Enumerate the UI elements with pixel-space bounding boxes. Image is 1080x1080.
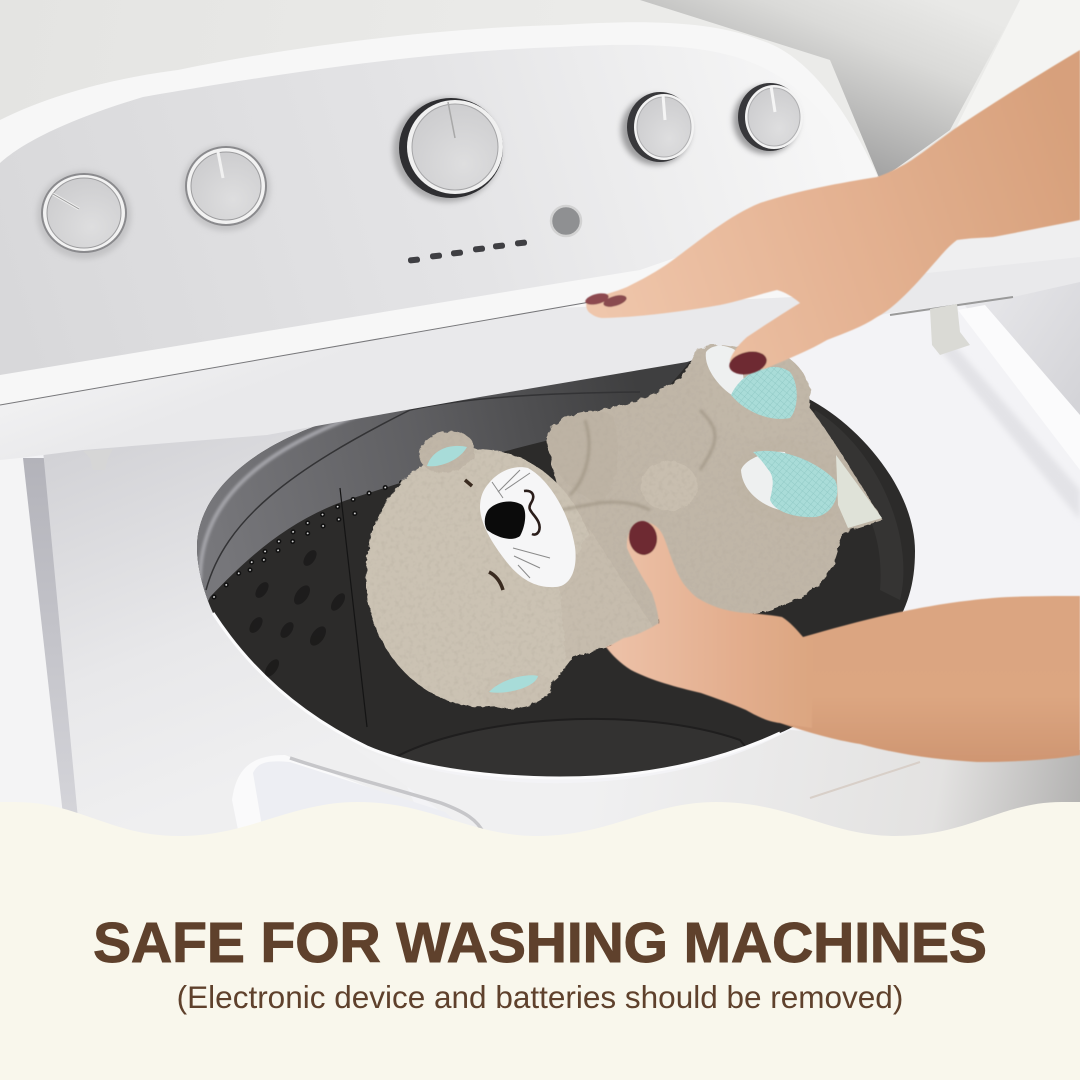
slot shadow edge <box>290 758 484 834</box>
wall background <box>0 0 1080 860</box>
drum outer right ring <box>814 410 903 600</box>
lid pin <box>83 449 113 470</box>
otter fold lines <box>560 410 715 510</box>
otter lower ear patch <box>489 675 538 693</box>
lid right edge line <box>890 297 1013 315</box>
otter whiskers <box>492 470 550 578</box>
otter ear patches <box>427 446 467 466</box>
otter neck <box>560 530 655 660</box>
left recessed deck <box>43 415 430 840</box>
otter eyes <box>465 480 503 590</box>
otter body <box>546 345 883 640</box>
otter muzzle <box>480 467 576 587</box>
lower hand nail <box>627 519 659 557</box>
drum agitator ring <box>396 718 746 756</box>
upper right white panel <box>955 0 1080 130</box>
washer drum <box>197 360 915 776</box>
right side grey surface <box>960 280 1080 440</box>
dial: far left knob <box>37 171 131 259</box>
washer console <box>0 22 877 410</box>
drum wall rim <box>198 419 356 580</box>
otter paw patches <box>706 346 837 517</box>
otter tail tag <box>836 455 882 528</box>
indicator lights <box>408 239 527 264</box>
otter small paw <box>641 461 697 511</box>
hand: upper on lid <box>584 50 1080 378</box>
lid <box>0 257 1080 470</box>
dial: large centre knob <box>393 98 503 202</box>
otter nose <box>485 501 525 539</box>
perforation rows <box>214 478 420 597</box>
console lip <box>0 22 877 410</box>
otter head <box>353 438 609 718</box>
otter fur <box>353 333 883 718</box>
upper hand nails <box>584 291 610 307</box>
right white strip <box>958 305 1080 470</box>
wall shadow behind console <box>640 0 1020 180</box>
drum opening rim <box>213 613 780 778</box>
slot ridge <box>232 755 480 840</box>
lower hand <box>606 522 812 728</box>
plush otter <box>353 333 883 718</box>
otter bottom ear <box>480 667 554 713</box>
otter top ear <box>415 427 479 477</box>
upper right washer surface <box>880 180 1080 300</box>
lid hairline <box>0 302 590 405</box>
otter lower foot <box>723 427 857 539</box>
corner seam <box>810 762 920 798</box>
subheading: (Electronic device and batteries should be removed) <box>177 979 903 1015</box>
drum floor holes <box>247 548 348 679</box>
drum wall seam <box>206 392 640 590</box>
lid hinge <box>930 304 970 355</box>
heading: SAFE FOR WASHING MACHINES <box>93 911 987 975</box>
otter mouth <box>524 491 540 535</box>
lower right corner surface <box>350 730 1080 840</box>
left edge strip <box>0 455 63 815</box>
hand: lower holding otter <box>606 519 1080 762</box>
detergent slot <box>253 761 465 830</box>
washer deck <box>0 280 1080 840</box>
indicator button <box>551 206 581 236</box>
otter arm fold <box>546 411 618 503</box>
scene: washing machine with plush otter <box>0 0 1080 836</box>
drum vertical seam <box>340 488 367 727</box>
drum inner wall <box>197 361 690 601</box>
dial: left knob <box>182 145 270 231</box>
lower forearm <box>740 596 1080 762</box>
right strip shadow <box>940 340 1080 520</box>
dial: far right knob <box>733 83 803 154</box>
left recess band <box>23 458 82 815</box>
dial: right knob <box>621 92 694 165</box>
otter upper foot <box>689 333 821 451</box>
console face <box>0 45 872 375</box>
